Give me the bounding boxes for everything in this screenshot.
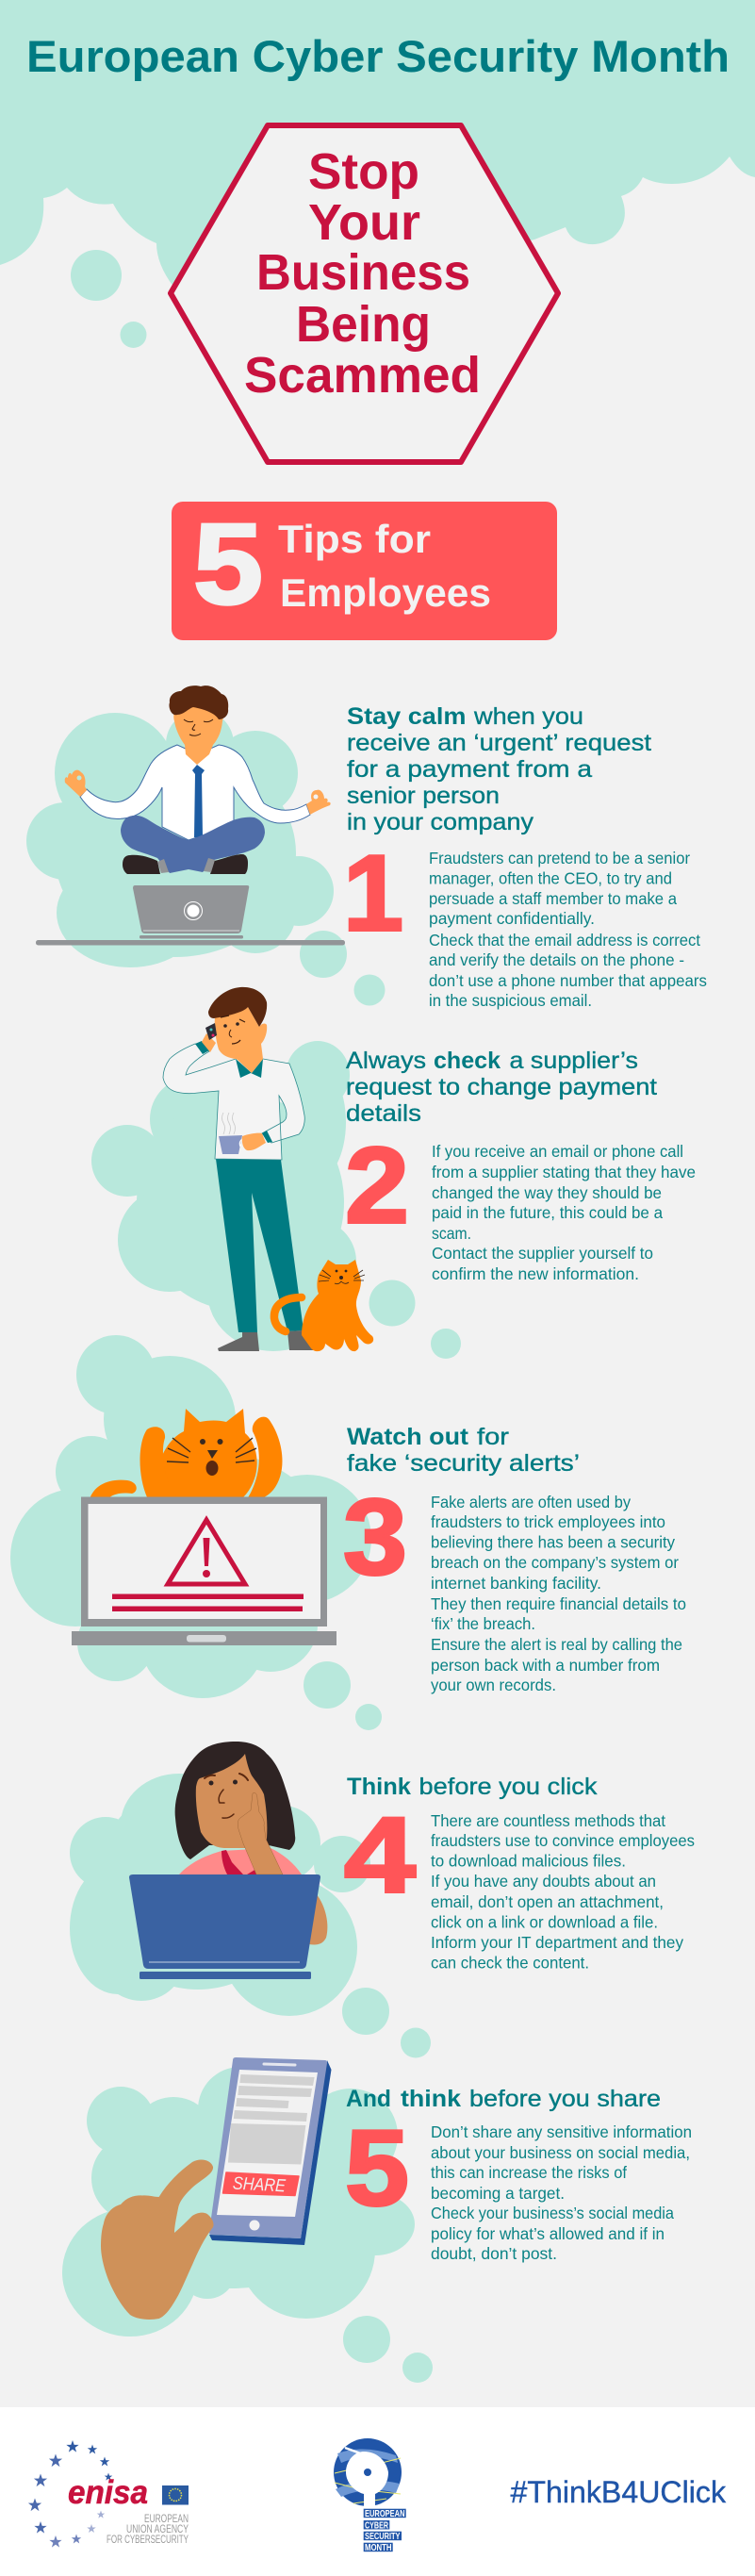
hashtag: #ThinkB4UClick: [511, 2475, 727, 2509]
phone body: [209, 2057, 332, 2245]
panel: hexagon headline: Stop: [308, 143, 419, 200]
tip 3 body: breach on the company’s system or: [431, 1553, 679, 1572]
panel: 5 tips banner: 5: [193, 500, 263, 628]
shoes: [123, 854, 248, 874]
logo: European Cyber Security Month: CYBER: [365, 2520, 389, 2531]
tip 1 heading: Stay calm: [347, 703, 466, 730]
title: European Cyber Security Month: [26, 31, 730, 81]
tip 3 body: believing there has been a security: [431, 1533, 675, 1552]
illustration: thinking woman at laptop: [70, 1742, 431, 2057]
facial features: [205, 1774, 248, 1818]
tip 5 body: becoming a target.: [431, 2184, 565, 2203]
desk line: [36, 940, 345, 945]
tip 1 body: [429, 849, 707, 1010]
sweater: [179, 1848, 302, 1874]
facial features: [184, 719, 213, 735]
panel: 5 tips banner: [172, 500, 557, 640]
logo: enisa: EUROPEAN: [144, 2512, 189, 2525]
tip 3 body: Ensure the alert is real by calling the: [431, 1635, 682, 1654]
tip 1 body: payment confidentially.: [429, 909, 595, 928]
tip 1 body: don’t use a phone number that appears: [429, 971, 707, 990]
panel: 5 tips banner: Employees: [280, 570, 491, 615]
tip 1 body: in the suspicious email.: [429, 991, 592, 1010]
tip 5 body: Don’t share any sensitive information: [431, 2122, 692, 2141]
trousers: [216, 1159, 304, 1332]
trousers: [121, 816, 265, 873]
tip 1 body: persuade a staff member to make a: [429, 889, 677, 908]
face: [215, 1007, 267, 1073]
tip 4 body: email, don’t open an attachment,: [431, 1892, 664, 1911]
tip 3 body: They then require financial details to: [431, 1594, 686, 1613]
laptop: [129, 1874, 320, 1979]
tie: [192, 765, 205, 837]
tip 2 heading: request to change payment: [346, 1074, 657, 1100]
panel: hexagon headline: Scammed: [244, 347, 481, 404]
tip 3 body: ‘fix’ the breach.: [431, 1614, 535, 1633]
tip 1 heading: [347, 703, 651, 835]
logo: enisa: [28, 2440, 189, 2548]
screen content: [228, 2074, 315, 2165]
panel: hexagon headline: Being: [296, 296, 431, 353]
tip 3 heading: fake ‘security alerts’: [347, 1450, 580, 1477]
tip 5 body: this can increase the risks of: [431, 2163, 627, 2182]
tip 2 body: from a supplier stating that they have: [432, 1163, 696, 1181]
tip 3 body: person back with a number from: [431, 1656, 660, 1675]
tip 3 heading: [347, 1424, 580, 1477]
hair: [175, 1742, 295, 1859]
tip 2 heading: check: [434, 1048, 501, 1074]
face: [196, 1754, 267, 1848]
tip 2 body: [432, 1142, 696, 1283]
hand: [101, 2160, 214, 2320]
tip 1 body: Check that the email address is correct: [429, 931, 700, 949]
tip 5 body: policy for what’s allowed and if in: [431, 2224, 665, 2243]
tip 4 heading: Think: [347, 1774, 411, 1800]
tip 2 body: paid in the future, this could be a: [432, 1203, 663, 1222]
cat: [274, 1260, 373, 1351]
tip 3 body: [431, 1493, 686, 1694]
tip 2 body: If you receive an email or phone call: [432, 1142, 683, 1161]
tip 5 body: about your business on social media,: [431, 2143, 690, 2162]
tip 4 body: click on a link or download a file.: [431, 1912, 658, 1931]
tip 4 body: to download malicious files.: [431, 1852, 626, 1871]
tip 3 body: fraudsters to trick employees into: [431, 1512, 665, 1531]
tip 1 body: Fraudsters can pretend to be a senior: [429, 849, 690, 867]
tip 5 heading: And: [346, 2086, 391, 2112]
tip 4 body: fraudsters use to convince employees: [431, 1831, 695, 1850]
tip 2 heading: a supplier’s: [509, 1048, 638, 1074]
hand and arm: [238, 1792, 283, 1874]
tip 4 heading: before you click: [419, 1774, 598, 1800]
tip 1 heading: receive an ‘urgent’ request: [347, 730, 651, 756]
logo: European Cyber Security Month: MONTH: [365, 2543, 392, 2553]
cat: [90, 1409, 282, 1500]
tip 3 heading: Watch out: [347, 1424, 469, 1450]
panel: hexagon headline: Your: [308, 194, 420, 251]
shirt: [163, 1044, 304, 1160]
illustration: man on phone with cat: [91, 987, 461, 1359]
tip 3 body: your own records.: [431, 1676, 556, 1694]
face: [173, 705, 223, 765]
tip 4 body: can check the content.: [431, 1954, 589, 1973]
number 5: 5: [345, 2108, 409, 2229]
number 1: 1: [343, 834, 403, 954]
tip 2 heading: Always: [346, 1048, 426, 1074]
laptop: [133, 885, 249, 933]
tip 1 heading: senior person: [347, 783, 500, 809]
tip 5 heading: think: [401, 2086, 461, 2112]
shoes: [218, 1330, 319, 1351]
logo: enisa: UNION AGENCY: [126, 2522, 189, 2535]
tip 4 heading: [347, 1774, 598, 1800]
hand: [242, 1133, 266, 1150]
tip 5 heading: [346, 2086, 661, 2112]
logo: enisa: enisa: [68, 2474, 148, 2511]
laptop base: [72, 1631, 336, 1645]
tip 4 body: If you have any doubts about an: [431, 1872, 656, 1891]
shirt: [80, 745, 310, 840]
tip 3 body: internet banking facility.: [431, 1574, 601, 1593]
tip 5 body: Check your business’s social media: [431, 2204, 674, 2222]
tip 3 body: Fake alerts are often used by: [431, 1493, 631, 1511]
logo: European Cyber Security Month: EUROPEAN: [365, 2509, 405, 2519]
tip 1 body: manager, often the CEO, to try and: [429, 869, 672, 888]
tip 5 body: doubt, don’t post.: [431, 2244, 557, 2263]
tip 3 heading: for: [477, 1424, 509, 1450]
logo: European Cyber Security Month: SECURITY: [365, 2532, 401, 2542]
hands: [65, 770, 331, 815]
tip 2 heading: [346, 1048, 657, 1127]
number 2: 2: [345, 1126, 409, 1247]
logo: enisa: FOR CYBERSECURITY: [107, 2533, 189, 2546]
tip 5 body: [431, 2122, 692, 2263]
illustration: hand tapping share on phone: [62, 2057, 433, 2383]
collar: [222, 1850, 256, 1874]
laptop screen: [81, 1497, 327, 1627]
top cloud background: [0, 0, 755, 348]
alert lines: [112, 1593, 304, 1611]
number 4: 4: [344, 1795, 416, 1916]
neck and collar: [181, 745, 214, 771]
cup with steam: [219, 1113, 242, 1154]
EU flag: [162, 2485, 189, 2504]
tip 4 body: [431, 1811, 695, 1973]
alert triangle: [168, 1520, 245, 1584]
tip 5 heading: before you share: [469, 2086, 661, 2112]
logo: European Cyber Security Month: [334, 2438, 406, 2553]
hair: [208, 987, 267, 1027]
panel: hexagon headline: Business: [256, 244, 470, 301]
socks: [157, 858, 215, 873]
cuffs and collar: [195, 1041, 272, 1143]
tip 2 body: scam.: [432, 1224, 471, 1243]
tip 2 body: changed the way they should be: [432, 1183, 662, 1202]
number 3: 3: [343, 1478, 407, 1597]
panel: 5 tips banner: Tips for: [278, 517, 431, 561]
panel: hexagon headline: [171, 125, 558, 462]
illustration: cat on laptop with alert: [10, 1335, 382, 1730]
tip 2 heading: details: [346, 1100, 421, 1127]
tip 1 heading: for a payment from a: [347, 756, 592, 783]
elbow: [309, 1893, 327, 1944]
tip 1 heading: in your company: [347, 809, 534, 835]
tip 2 body: Contact the supplier yourself to: [432, 1244, 653, 1263]
tip 4 body: There are countless methods that: [431, 1811, 665, 1830]
tip 4 body: Inform your IT department and they: [431, 1933, 683, 1952]
illustration: meditating man on laptop: [26, 685, 385, 1005]
tip 1 body: and verify the details on the phone -: [429, 950, 684, 969]
tip 2 body: confirm the new information.: [432, 1264, 639, 1283]
share button: SHARE: [232, 2174, 287, 2196]
phone: [202, 1023, 217, 1052]
facial features: [221, 1016, 245, 1044]
tip 1 heading: when you: [473, 703, 583, 730]
hair: [169, 685, 228, 719]
panel: footer: [0, 2407, 755, 2576]
